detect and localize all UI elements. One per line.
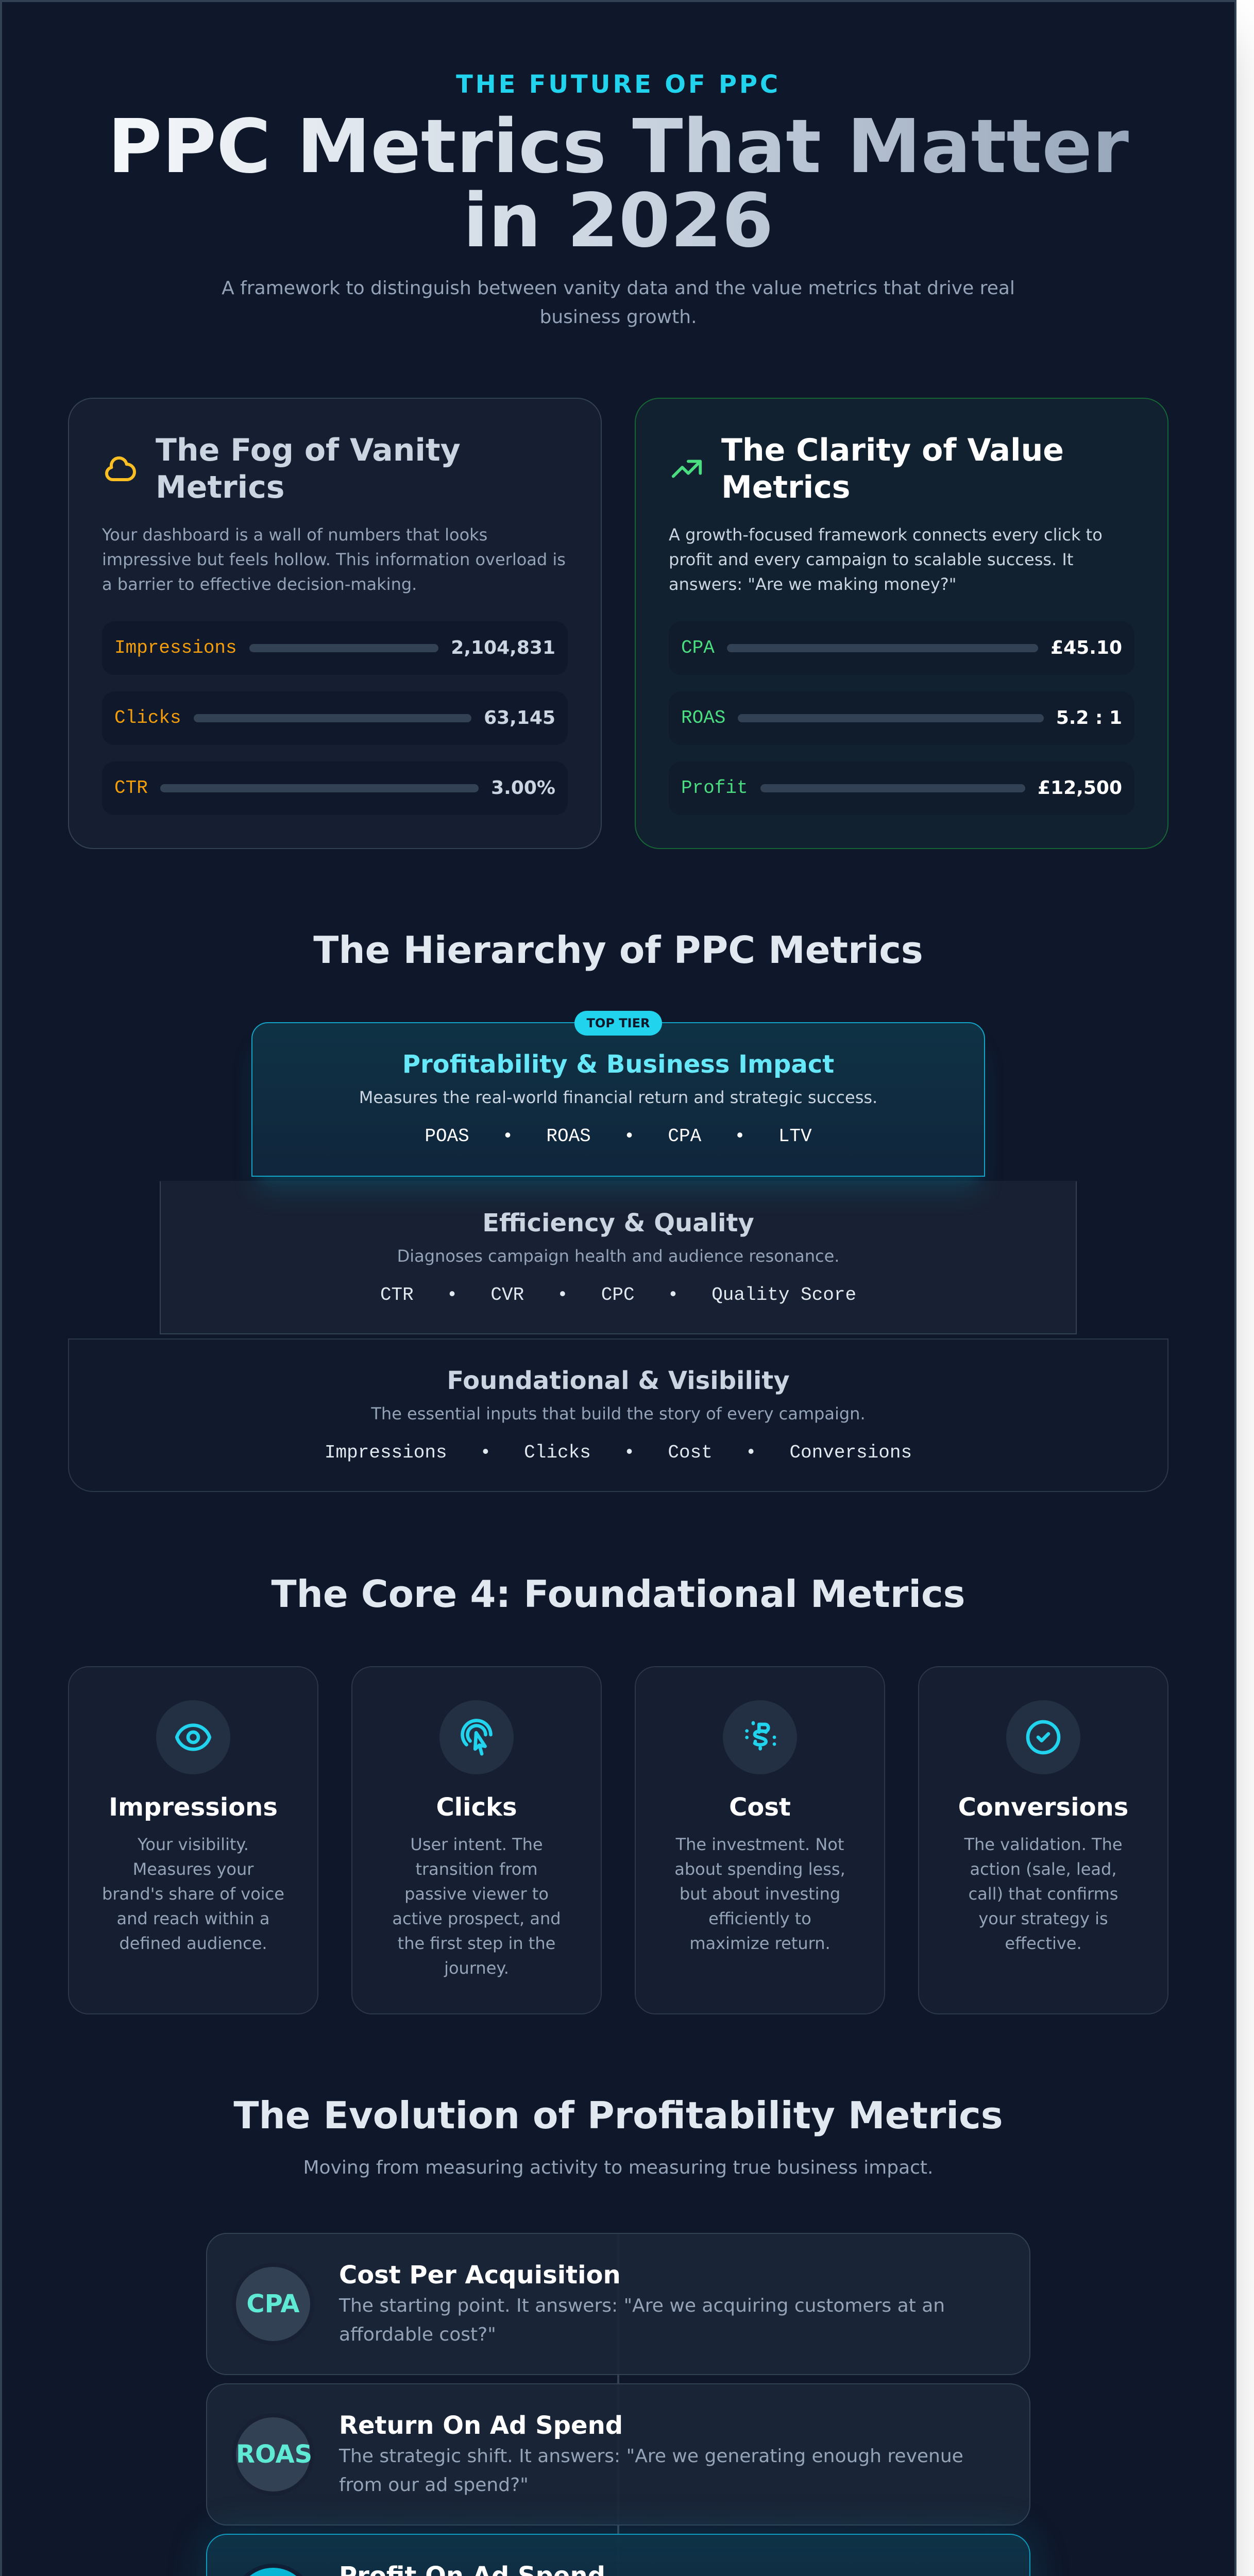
heading: evolution: The Evolution of Profitability Metrics — [233, 2094, 1003, 2137]
card text: journey. — [444, 1958, 509, 1978]
row: cpa: CPA — [681, 637, 715, 658]
tier metrics: • — [480, 1442, 491, 1463]
tier metrics: • — [745, 1442, 756, 1463]
subtitle: A framework to distinguish between vanity data and the value metrics that drive real — [222, 278, 1015, 299]
tier metrics: Impressions — [325, 1442, 447, 1463]
icon: eye — [156, 1700, 230, 1774]
heading text: Metrics — [156, 469, 285, 505]
tier metrics: • — [624, 1442, 635, 1463]
card: cost — [635, 1666, 885, 2014]
row: ctr — [102, 761, 568, 815]
description: a barrier to effective decision-making. — [102, 574, 417, 594]
card text: maximize return. — [689, 1934, 831, 1953]
card text: passive viewer to — [404, 1884, 549, 1904]
step: roas — [206, 2383, 1030, 2526]
step title: Return On Ad Spend — [339, 2411, 623, 2440]
row: profit: Profit — [681, 777, 748, 799]
card text — [392, 1835, 561, 1978]
row: clicks: 63,145 — [484, 707, 555, 728]
step description — [339, 2295, 945, 2345]
heading text — [156, 432, 461, 505]
top tier badge — [574, 1011, 662, 1036]
card text: The investment. Not — [676, 1835, 844, 1854]
tier: foundational — [68, 1338, 1168, 1492]
tier metrics: CTR — [380, 1284, 414, 1306]
icon: dollar — [723, 1700, 797, 1774]
tier title: Profitability & Business Impact — [402, 1050, 834, 1079]
evolution subtitle: Moving from measuring activity to measuring true business impact. — [303, 2157, 933, 2178]
tier metrics: CVR — [490, 1284, 524, 1306]
tier metrics — [425, 1126, 812, 1147]
tier metrics: Cost — [668, 1442, 713, 1463]
heading text: The Clarity of Value — [721, 432, 1064, 468]
card text: Measures your — [133, 1859, 253, 1879]
tier metrics: Clicks — [524, 1442, 591, 1463]
tier title: Efficiency & Quality — [482, 1209, 754, 1238]
badge: ROAS — [236, 2440, 312, 2469]
step description: The strategic shift. It answers: "Are we generating enough revenue — [339, 2446, 963, 2467]
tier metrics: Conversions — [789, 1442, 912, 1463]
card text: but about investing — [680, 1884, 840, 1904]
step: poas — [206, 2534, 1030, 2576]
badge — [236, 2568, 310, 2576]
description: profit and every campaign to scalable success. It — [669, 550, 1073, 569]
subtitle — [222, 278, 1015, 328]
tier description: The essential inputs that build the story of every campaign. — [371, 1404, 866, 1423]
card text: The validation. The — [964, 1835, 1123, 1854]
row: roas: 5.2 : 1 — [1056, 707, 1122, 728]
title — [70, 109, 1166, 258]
row: cpa — [669, 621, 1134, 675]
card title: Cost — [729, 1793, 791, 1822]
description: A growth-focused framework connects every click to — [669, 525, 1103, 545]
icon: trending up — [672, 460, 702, 478]
icon: cloud — [105, 456, 136, 481]
panel: clarity of value metrics — [635, 398, 1168, 849]
step description: from our ad spend?" — [339, 2475, 529, 2496]
description: Your dashboard is a wall of numbers that looks — [102, 525, 487, 545]
eyebrow: THE FUTURE OF PPC — [456, 70, 781, 99]
tier metrics: LTV — [778, 1126, 812, 1147]
step description — [339, 2446, 963, 2496]
card text: effective. — [1005, 1934, 1082, 1953]
row: roas: ROAS — [681, 707, 725, 728]
card text: call) that confirms — [969, 1884, 1118, 1904]
row: roas — [669, 691, 1134, 745]
tier metrics: • — [447, 1284, 457, 1306]
card text: efficiently to — [708, 1909, 811, 1928]
tier metrics: • — [734, 1126, 745, 1147]
card text: and reach within a — [116, 1909, 270, 1928]
icon: cursor ripple — [439, 1700, 514, 1774]
tier: profitability — [251, 1022, 985, 1177]
tier metrics: • — [557, 1284, 568, 1306]
description — [669, 525, 1103, 594]
step text — [339, 2261, 945, 2345]
heading text: Metrics — [721, 469, 851, 505]
tier metrics: CPC — [601, 1284, 635, 1306]
card text — [674, 1835, 845, 1953]
tier metrics: Quality Score — [711, 1284, 856, 1306]
subtitle: business growth. — [539, 307, 697, 328]
description — [102, 525, 566, 594]
tier metrics: • — [624, 1126, 635, 1147]
row: clicks — [102, 691, 568, 745]
heading text: The Fog of Vanity — [156, 432, 461, 468]
tier metrics: POAS — [425, 1126, 469, 1147]
row: ctr: 3.00% — [491, 777, 555, 799]
heading text — [721, 432, 1064, 505]
row: impressions: Impressions — [114, 637, 237, 658]
tier metrics: • — [502, 1126, 513, 1147]
badge — [236, 2417, 310, 2492]
step: cpa — [206, 2233, 1030, 2375]
card text: your strategy is — [978, 1909, 1108, 1928]
row: profit — [669, 761, 1134, 815]
card text: about spending less, — [674, 1859, 845, 1879]
panel heading — [105, 432, 461, 505]
card: impressions — [68, 1666, 318, 2014]
top tier badge: TOP TIER — [587, 1016, 650, 1030]
step description: affordable cost?" — [339, 2324, 496, 2345]
title: in 2026 — [463, 177, 773, 264]
description: answers: "Are we making money?" — [669, 574, 956, 594]
card text: action (sale, lead, — [970, 1859, 1117, 1879]
row: ctr: CTR — [114, 777, 148, 799]
connector line — [617, 2233, 619, 2576]
tier title: Foundational & Visibility — [447, 1366, 790, 1395]
heading: core 4: The Core 4: Foundational Metrics — [271, 1572, 965, 1616]
tier description: Measures the real-world financial return and strategic success. — [359, 1088, 877, 1107]
value metric rows — [681, 637, 1122, 799]
step description: The starting point. It answers: "Are we acquiring customers at an — [339, 2295, 945, 2316]
row: cpa: £45.10 — [1050, 637, 1122, 658]
vanity metric rows — [114, 637, 555, 799]
tier description: Diagnoses campaign health and audience resonance. — [397, 1246, 839, 1266]
tier metrics — [325, 1442, 912, 1463]
card text: Your visibility. — [138, 1835, 249, 1854]
card text — [102, 1835, 284, 1953]
card title: Impressions — [109, 1793, 278, 1822]
card text: defined audience. — [119, 1934, 267, 1953]
step text — [339, 2411, 963, 2496]
tier metrics: • — [668, 1284, 679, 1306]
card text: User intent. The — [410, 1835, 543, 1854]
card text: the first step in the — [398, 1934, 555, 1953]
card: conversions — [918, 1666, 1168, 2014]
tier: efficiency — [160, 1181, 1077, 1334]
card title: Clicks — [436, 1793, 517, 1822]
card text: brand's share of voice — [102, 1884, 284, 1904]
step title: Cost Per Acquisition — [339, 2261, 621, 2290]
card text — [964, 1835, 1123, 1953]
card text: transition from — [415, 1859, 538, 1879]
title: PPC Metrics That Matter — [108, 103, 1129, 190]
row: profit: £12,500 — [1038, 777, 1122, 799]
panel: fog of vanity metrics — [68, 398, 602, 849]
row: impressions: 2,104,831 — [451, 637, 555, 658]
tier metrics: ROAS — [546, 1126, 591, 1147]
badge: CPA — [246, 2290, 300, 2318]
description: impressive but feels hollow. This information overload is — [102, 550, 566, 569]
row: impressions — [102, 621, 568, 675]
tier metrics — [380, 1284, 856, 1306]
row: clicks: Clicks — [114, 707, 181, 728]
card text: active prospect, and — [392, 1909, 561, 1928]
icon: check circle — [1006, 1700, 1080, 1774]
card: clicks — [351, 1666, 602, 2014]
heading: hierarchy: The Hierarchy of PPC Metrics — [313, 928, 923, 972]
panel heading — [672, 432, 1064, 505]
card title: Conversions — [958, 1793, 1128, 1822]
badge — [236, 2267, 310, 2341]
tier metrics: CPA — [668, 1126, 701, 1147]
